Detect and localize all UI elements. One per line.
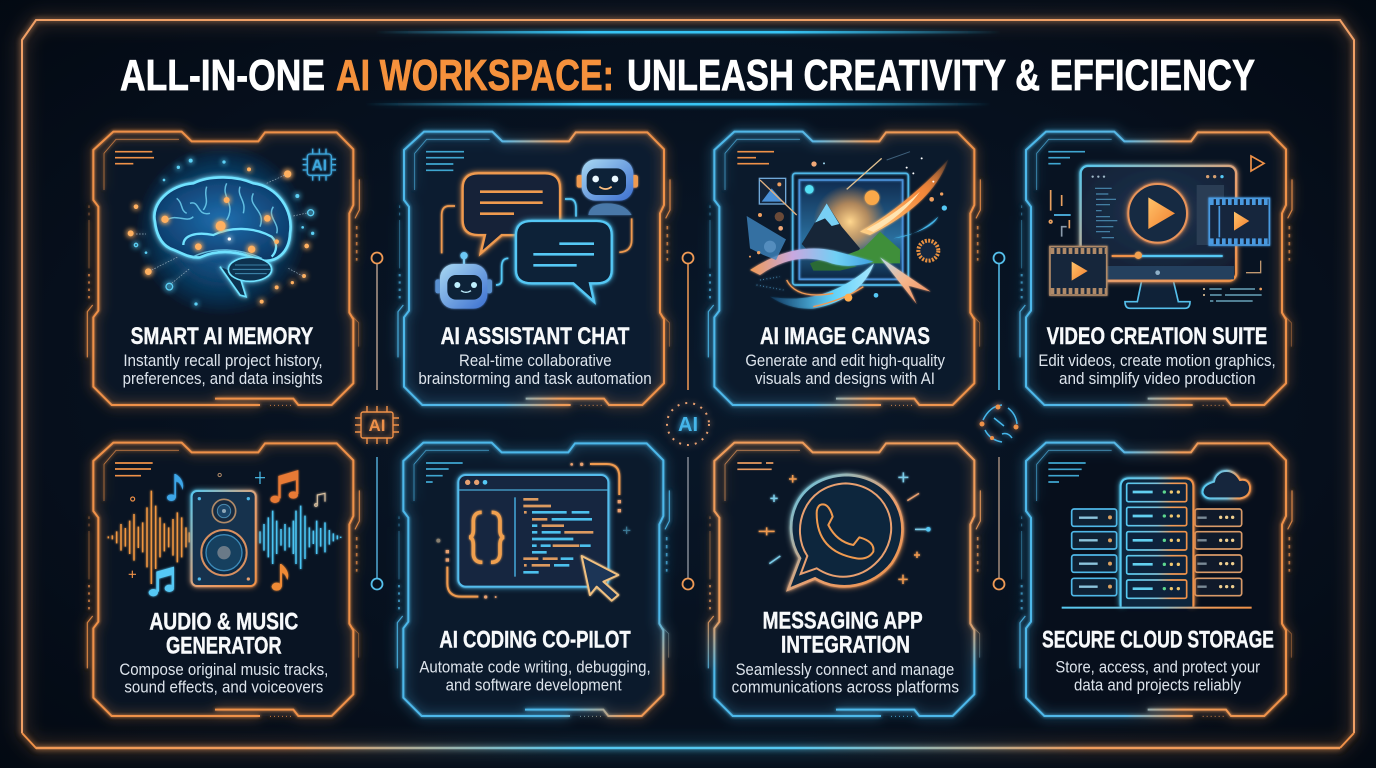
heading: AI IMAGE CANVAS: [760, 324, 930, 350]
icon: blue chat bubble: [516, 221, 612, 302]
icon: glowing brain: [135, 143, 308, 317]
heading: AI ASSISTANT CHAT: [441, 324, 630, 350]
heading: AUDIO & MUSIC: [149, 609, 298, 635]
icon: AI chip badge: AI: [312, 157, 327, 174]
blue waveform: [260, 506, 341, 569]
panel: smart AI memory: [87, 132, 359, 405]
panel: secure cloud storage: [1020, 443, 1292, 716]
icon: AI dotted ring: AI: [678, 414, 698, 436]
icon: messaging bubble with phone: [788, 475, 902, 589]
description: Automate code writing, debugging,: [419, 658, 651, 677]
description: and simplify video production: [1059, 369, 1256, 388]
heading: GENERATOR: [166, 633, 282, 659]
tool glyphs: [1049, 190, 1071, 237]
description: sound effects, and voiceovers: [124, 678, 323, 697]
frame: [87, 132, 359, 405]
description: Generate and edit high-quality: [745, 351, 946, 370]
small data lines: [1203, 261, 1262, 301]
description: [119, 660, 328, 697]
icon: gear: [918, 241, 938, 261]
description: Real-time collaborative: [459, 351, 612, 370]
heading: SMART AI MEMORY: [131, 324, 314, 350]
brain network nodes: [128, 159, 314, 306]
icon: curly braces: [469, 512, 504, 562]
scattered dots: [749, 157, 947, 302]
icon: gradient cursor: [880, 257, 931, 304]
frame: [708, 132, 980, 405]
description: Seamlessly connect and manage: [736, 660, 954, 679]
frame: [398, 132, 670, 405]
icon: music notes: [149, 470, 325, 596]
heading: MESSAGING APP: [763, 608, 923, 634]
frame: [397, 443, 669, 716]
heading: [149, 609, 298, 659]
description: data and projects reliably: [1074, 676, 1242, 695]
menu lines: [1048, 463, 1086, 482]
description: [418, 351, 652, 388]
menu lines: [1048, 152, 1085, 164]
description: communications across platforms: [732, 678, 959, 697]
icon: play outline: [1251, 156, 1264, 171]
icon: AI chip connector: [355, 406, 399, 444]
icon: comet streak: [847, 152, 948, 238]
description: [123, 351, 323, 388]
icon: AI chip badge: [303, 149, 336, 181]
icon: main play button: [1128, 184, 1187, 243]
timeline: [1112, 252, 1223, 259]
title: [120, 51, 1255, 100]
connector: column 2 bottom: [682, 457, 694, 590]
code lines: [515, 497, 593, 577]
connector: column 1 bottom: [372, 457, 382, 590]
sparkles: [759, 472, 931, 584]
panel: AI image canvas: [708, 132, 980, 405]
description: [745, 351, 946, 388]
icon: AI dotted ring: [667, 403, 709, 445]
icon: monitor: [1081, 166, 1236, 308]
icon: network node: [980, 404, 1018, 442]
icon: AI chip connector: AI: [368, 416, 386, 435]
orange brackets: [436, 463, 630, 599]
panel: audio and music generator: [87, 443, 359, 716]
description: visuals and designs with AI: [755, 369, 935, 388]
heading: VIDEO CREATION SUITE: [1047, 324, 1267, 350]
menu lines: [115, 463, 153, 476]
icon: robot top right: [577, 159, 638, 215]
description: brainstorming and task automation: [418, 369, 652, 388]
icon: brush waves: [750, 248, 874, 309]
connector: column 1 top: [372, 252, 382, 390]
heading: INTEGRATION: [781, 633, 910, 659]
menu lines: [737, 463, 773, 469]
frame: [1020, 443, 1292, 716]
icon: right server stack: [1195, 509, 1242, 596]
heading: [763, 608, 923, 659]
icon: speaker: [192, 491, 256, 586]
description: [1055, 658, 1260, 695]
frame: [1020, 132, 1292, 405]
description: and software development: [446, 676, 622, 695]
title: AI WORKSPACE:: [336, 51, 614, 100]
icon: orange chat bubble: [463, 173, 560, 253]
description: Compose original music tracks,: [119, 660, 328, 679]
icon: left server stack: [1072, 509, 1117, 596]
description: [732, 660, 959, 697]
icon: cloud: [1203, 471, 1250, 498]
connector: column 2 top: [682, 252, 694, 390]
menu lines: [737, 152, 774, 164]
connector: column 3 top: [994, 252, 1004, 390]
heading: SECURE CLOUD STORAGE: [1042, 627, 1274, 653]
connector: column 3 bottom: [994, 457, 1004, 590]
icon: canvas picture: [793, 173, 908, 285]
panel: AI assistant chat: [398, 132, 670, 405]
orange waveform: [108, 491, 189, 584]
header accent lines: [365, 31, 1001, 106]
menu lines: [426, 463, 463, 482]
icon: arrow cursor: [582, 556, 618, 601]
description: preferences, and data insights: [123, 369, 323, 388]
description: Edit videos, create motion graphics,: [1038, 351, 1276, 370]
icon: small picture frame: [759, 178, 797, 215]
icon: blue shard: [747, 216, 786, 260]
icon: code window: [458, 475, 608, 587]
panel: AI coding co-pilot: [397, 443, 669, 716]
sparkles: [129, 472, 265, 578]
menu lines: [426, 152, 464, 170]
panel: video creation suite: [1020, 132, 1292, 405]
description: [419, 658, 651, 695]
title: ALL-IN-ONE: [120, 51, 325, 100]
panel: messaging app integration: [708, 443, 980, 716]
frame: [708, 443, 980, 716]
base line: [1062, 607, 1252, 609]
connector traces: [442, 199, 632, 285]
icon: film strip right: [1209, 198, 1269, 245]
description: Store, access, and protect your: [1055, 658, 1260, 677]
frame: [87, 443, 359, 716]
description: [1038, 351, 1276, 388]
icon: film strip left: [1050, 247, 1107, 295]
icon: main server tower: [1121, 478, 1193, 607]
heading: AI CODING CO-PILOT: [439, 627, 631, 653]
description: Instantly recall project history,: [123, 351, 323, 370]
menu lines: [115, 152, 154, 164]
icon: robot bottom left: [435, 252, 492, 309]
